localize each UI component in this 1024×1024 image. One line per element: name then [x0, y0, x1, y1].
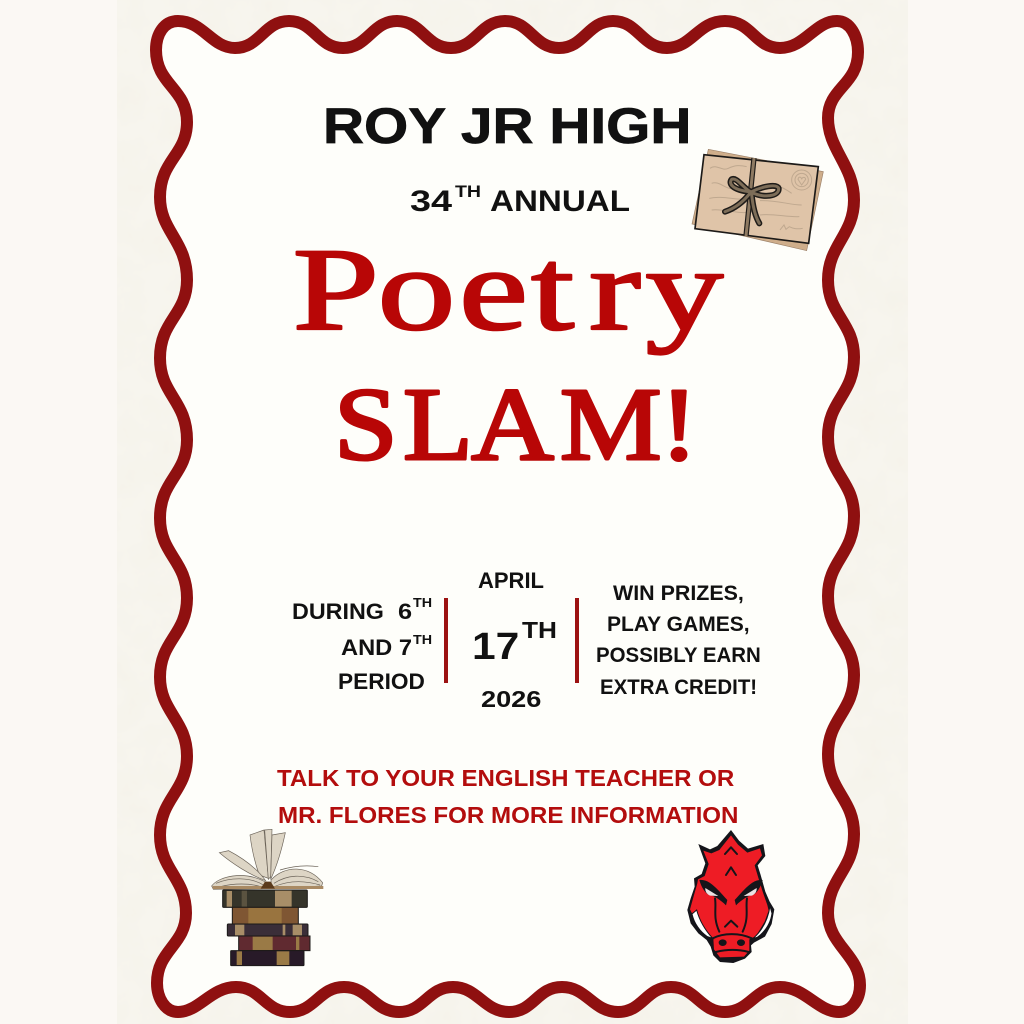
center text block: date	[472, 568, 557, 712]
title: SLAM!: SLAM!	[334, 367, 698, 482]
center text block: date: TH	[522, 618, 557, 644]
right text block: prizes: WIN PRIZES,	[613, 582, 744, 605]
title: Poetry: Poetry	[293, 224, 723, 355]
icon: tied postcards	[692, 149, 823, 251]
34th annual subheading: ANNUAL	[490, 183, 630, 218]
left text block: period: TH	[413, 633, 432, 647]
left text block: period	[292, 596, 432, 694]
divider right	[575, 598, 579, 683]
left text block: period: 6	[398, 600, 412, 625]
icon: stack of books with open book	[212, 829, 323, 966]
call to action text: TALK TO YOUR ENGLISH TEACHER OR	[277, 765, 734, 791]
left text block: period: TH	[413, 596, 432, 610]
center text block: date: APRIL	[478, 568, 544, 593]
call to action text: MR. FLORES FOR MORE INFORMATION	[278, 803, 738, 828]
divider left	[444, 598, 448, 683]
left text block: period: AND 7	[341, 635, 412, 660]
right text block: prizes: POSSIBLY EARN	[596, 644, 761, 667]
34th annual subheading: 34	[410, 185, 452, 218]
right text block: prizes: PLAY GAMES,	[607, 613, 750, 636]
center text block: date: 2026	[481, 687, 541, 712]
icon: razorback hog mascot	[687, 830, 774, 963]
wavy red border frame	[156, 21, 860, 1012]
paper background band	[117, 0, 908, 1024]
left text block: period: DURING	[292, 599, 384, 624]
right text block: prizes: EXTRA CREDIT!	[600, 676, 757, 699]
school name heading: ROY JR HIGH	[323, 99, 691, 154]
center text block: date: 17	[472, 624, 519, 667]
left text block: period: PERIOD	[338, 669, 425, 694]
34th annual subheading	[410, 181, 630, 218]
right text block: prizes	[596, 582, 761, 699]
call to action text	[277, 765, 738, 828]
34th annual subheading: TH	[455, 181, 481, 201]
